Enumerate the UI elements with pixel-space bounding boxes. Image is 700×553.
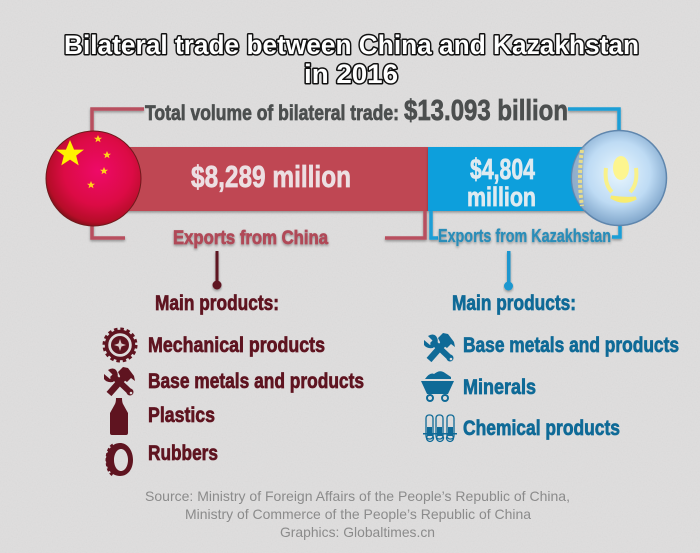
source note: Ministry of Commerce of the People’s Republic of China bbox=[185, 506, 531, 522]
item: plastics bbox=[110, 398, 215, 435]
bar: Kazakhstan exports: million bbox=[467, 182, 536, 212]
connector: China exports label bbox=[92, 211, 425, 238]
title: in 2016 bbox=[304, 59, 398, 89]
item: base metals and products bbox=[104, 367, 364, 396]
item: rubbers: Rubbers bbox=[148, 442, 218, 465]
total volume of bilateral trade: Total volume of bilateral trade: bbox=[145, 102, 399, 125]
item: base metals and products bbox=[424, 333, 679, 362]
connector: Kazakhstan exports label bbox=[431, 211, 620, 238]
item: chemical products: Chemical products bbox=[463, 417, 620, 440]
stem: China products bbox=[212, 251, 222, 290]
source note bbox=[145, 488, 570, 540]
icon: China flag globe bbox=[46, 131, 141, 226]
total volume of bilateral trade: $13.093 billion bbox=[404, 95, 568, 127]
panel: China main products bbox=[104, 292, 364, 476]
item: base metals and products: Base metals and products bbox=[148, 370, 364, 393]
panel: Kazakhstan main products bbox=[421, 292, 679, 442]
icon: Kazakhstan flag globe bbox=[572, 130, 666, 226]
connector: total to Kazakhstan bbox=[568, 109, 619, 133]
heading: main products: Main products: bbox=[155, 292, 279, 315]
bar: China exports: $8,289 million bbox=[191, 159, 351, 194]
item: chemical products bbox=[423, 415, 620, 442]
connector: total to China bbox=[92, 109, 144, 133]
label: exports from China: Exports from China bbox=[173, 227, 328, 249]
bar: China exports bbox=[110, 147, 428, 211]
item: minerals: Minerals bbox=[463, 376, 536, 399]
source note: Graphics: Globaltimes.cn bbox=[280, 524, 435, 540]
title bbox=[64, 30, 639, 89]
stem: Kazakhstan products bbox=[504, 251, 513, 290]
item: mechanical products: Mechanical products bbox=[148, 334, 325, 357]
total volume of bilateral trade bbox=[145, 95, 568, 127]
item: minerals bbox=[421, 371, 536, 401]
source note: Source: Ministry of Foreign Affairs of the People’s Republic of China, bbox=[145, 488, 570, 504]
title: Bilateral trade between China and Kazakhstan bbox=[64, 30, 639, 60]
heading: main products: Main products: bbox=[452, 292, 576, 315]
item: plastics: Plastics bbox=[148, 404, 215, 427]
item: rubbers bbox=[106, 442, 218, 476]
label: exports from Kazakhstan: Exports from Kazakhstan bbox=[438, 226, 611, 246]
bar: Kazakhstan exports bbox=[428, 147, 593, 212]
bar: Kazakhstan exports: $4,804 bbox=[470, 154, 535, 186]
item: mechanical products bbox=[104, 329, 325, 361]
